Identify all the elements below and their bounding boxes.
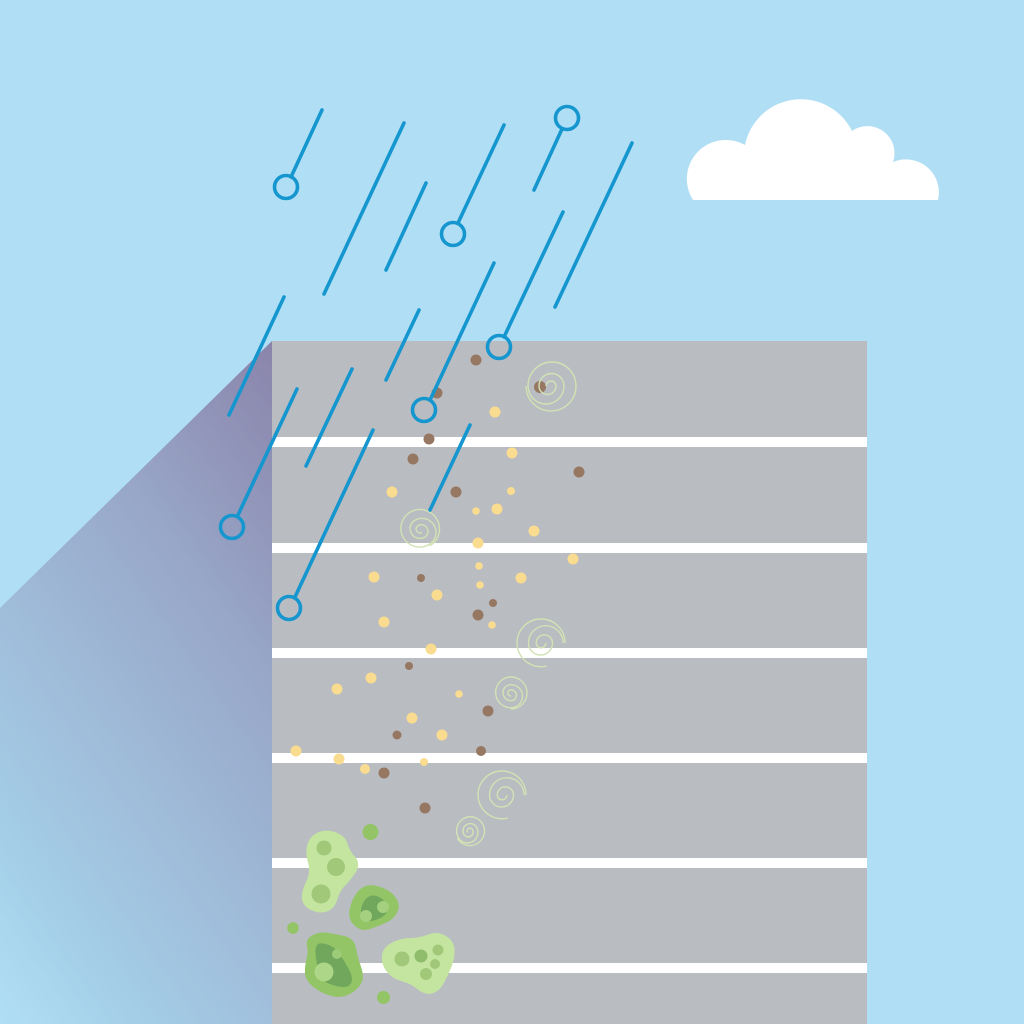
algae and moss growth — [287, 824, 453, 1004]
building shadow — [0, 341, 272, 1024]
yellow pollen particles — [290, 406, 578, 774]
icon: cloud — [687, 99, 939, 200]
moss blob: small dark cluster — [351, 887, 397, 928]
raindrop with ring — [220, 389, 297, 538]
spiral spores — [394, 362, 576, 851]
raindrop with ring — [274, 110, 322, 198]
rain streaks and droplets — [220, 106, 632, 620]
moss blob: wide light cluster — [384, 935, 453, 992]
moss blob: tall light cluster — [304, 833, 356, 911]
raindrop with ring — [488, 212, 563, 358]
building facade — [272, 341, 867, 1024]
raindrop with ring on top — [534, 106, 578, 190]
moss blob: large dark cluster — [306, 934, 361, 995]
raindrop with ring — [412, 263, 494, 422]
green spore dots — [287, 824, 390, 1004]
raindrop with ring — [442, 125, 504, 246]
raindrop with ring — [278, 430, 373, 620]
brown dirt particles — [378, 354, 584, 814]
